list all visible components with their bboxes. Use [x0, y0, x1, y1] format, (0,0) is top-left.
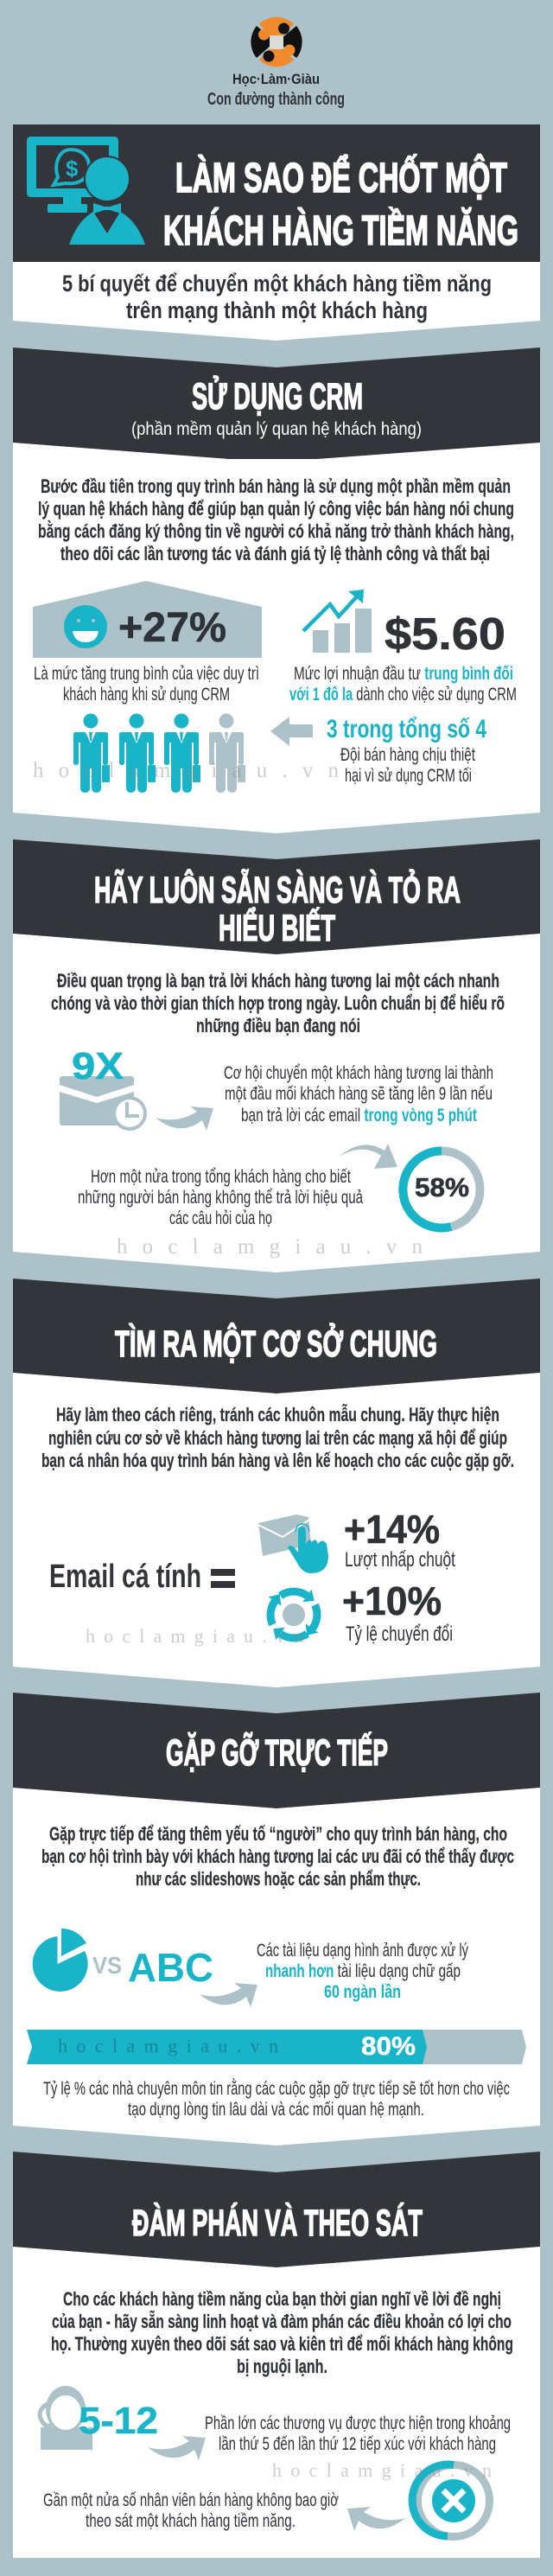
watermark: hoclamgiau.vn — [86, 1625, 303, 1647]
text: images vs words: 60 ngàn lần — [324, 1982, 401, 2002]
icon: salesperson at monitor: $ — [66, 156, 79, 182]
panel: section 3 — [13, 1278, 540, 1687]
caption: 3 of 4: Đội bán hàng chịu thiệt — [340, 745, 475, 765]
icon: salesperson at monitor — [27, 137, 145, 245]
stat: 5-12: 5-12 — [79, 2400, 158, 2442]
text: 9X: bạn trả lời các email trong vòng 5 phút — [241, 1106, 477, 1125]
title banner — [13, 124, 540, 262]
panel: section 1 CRM — [13, 348, 540, 833]
intro text: những điều bạn đang nói — [196, 1015, 360, 1036]
intro text — [51, 970, 505, 1036]
stat: 9X: 9X — [72, 1045, 124, 1087]
logo name: Học·Làm·Giàu — [232, 71, 320, 87]
value: 58% — [415, 1172, 469, 1202]
logo tagline: Con đường thành công — [207, 90, 345, 109]
icon: pie chart — [33, 1929, 88, 1992]
heading — [94, 869, 461, 949]
caption: 80%: tạo dựng lòng tin lâu dài và các mối quan hệ mạnh. — [128, 2100, 424, 2120]
icon: phone agent — [40, 2386, 92, 2450]
arrow — [156, 1106, 213, 1131]
stat: $5.60: $5.60 — [385, 609, 505, 660]
icon: mail click — [258, 1514, 328, 1573]
chart: ring with cross — [412, 2464, 489, 2536]
caption: $5.60: Mức lợi nhuận đầu tư trung bình đối — [294, 664, 513, 684]
text: follow up: theo sát một khách hàng tiềm năng. — [86, 2511, 296, 2531]
icon: envelope with clock — [60, 1076, 147, 1131]
panel: section 4 — [13, 1693, 540, 2146]
caption: +10%: Tỷ lệ chuyển đổi — [346, 1623, 453, 1646]
text: 58%: những người bán hàng không thể trả lời hiệu quả — [78, 1188, 363, 1208]
watermark: hoclamgiau.vn — [58, 2035, 278, 2056]
value: +27% — [118, 605, 226, 651]
value: 80% — [361, 2032, 416, 2061]
subtitle ribbon — [13, 262, 540, 341]
icon: four salespeople — [73, 714, 245, 793]
intro text — [41, 1823, 514, 1890]
stat: +14%: +14% — [344, 1507, 440, 1552]
intro text: bị nguội lạnh. — [237, 2356, 327, 2377]
stat: +27% — [33, 581, 262, 658]
chart: 80% bar — [27, 2030, 526, 2064]
icon: conversion cycle — [269, 1590, 318, 1640]
text: images vs words: nhanh hơn tài liệu dạng chữ gấp — [265, 1961, 461, 1981]
text: 9X — [224, 1063, 493, 1125]
text: images vs words: Các tài liệu dạng hình ảnh được xử lý — [257, 1941, 468, 1961]
caption: 3 of 4: hại vì sử dụng CRM tối — [345, 766, 472, 786]
stat: 3 of 4: 3 trong tổng số 4 — [327, 715, 486, 743]
text: 58%: các câu hỏi của họ — [169, 1208, 272, 1228]
caption: +27%: khách hàng khi sử dụng CRM — [63, 685, 230, 705]
icon: growth chart — [303, 590, 372, 653]
text: 58% — [78, 1167, 363, 1228]
arrow: pointing to people — [270, 717, 313, 746]
intro text: như các slideshows hoặc các sản phẩm thực. — [136, 1868, 421, 1890]
logo — [251, 17, 302, 67]
heading: HIỂU BIẾT — [219, 907, 335, 949]
caption: +27% — [34, 664, 259, 705]
text: follow up: Gần một nửa số nhân viên bán hàng không bao giờ — [43, 2490, 339, 2510]
subheading: (phần mềm quản lý quan hệ khách hàng) — [131, 419, 422, 439]
text: follow up — [43, 2490, 339, 2531]
arrow — [148, 2436, 206, 2460]
panel: section 2 — [13, 839, 540, 1272]
text: 5-12 — [205, 2413, 511, 2454]
caption: $5.60 — [289, 664, 517, 705]
label: vs: VS — [92, 1952, 122, 1979]
heading: SỬ DỤNG CRM — [192, 375, 363, 418]
subtitle line 2: trên mạng thành một khách hàng — [126, 297, 428, 323]
intro text — [38, 475, 514, 564]
watermark: hoclamgiau.vn — [272, 2459, 492, 2481]
intro text — [51, 2288, 513, 2377]
watermark: hoclamgiau.vn — [33, 759, 339, 782]
label: ABC: ABC — [128, 1945, 213, 1990]
caption: +27%: Là mức tăng trung bình của việc duy trì — [34, 664, 259, 684]
label: personalised email: Email cá tính — [49, 1559, 201, 1595]
caption: +14%: Lượt nhấp chuột — [345, 1548, 455, 1572]
intro text — [41, 1404, 514, 1471]
icon: smiley — [64, 605, 107, 648]
arrow — [200, 1983, 257, 2007]
chart: 58% donut — [403, 1151, 480, 1227]
heading: GẶP GỠ TRỰC TIẾP — [166, 1731, 388, 1774]
equals sign — [211, 1569, 235, 1588]
stat: +10%: +10% — [342, 1578, 442, 1623]
text: images vs words — [257, 1941, 468, 2002]
arrow — [339, 1144, 397, 1169]
arrow — [347, 2507, 405, 2531]
text: 58%: Hơn một nửa trong tổng khách hàng cho biết — [91, 1167, 351, 1187]
panel: section 5 — [13, 2152, 540, 2558]
caption: 3 of 4 — [340, 745, 475, 786]
watermark: hoclamgiau.vn — [117, 1235, 423, 1259]
caption: 80% — [43, 2079, 510, 2120]
